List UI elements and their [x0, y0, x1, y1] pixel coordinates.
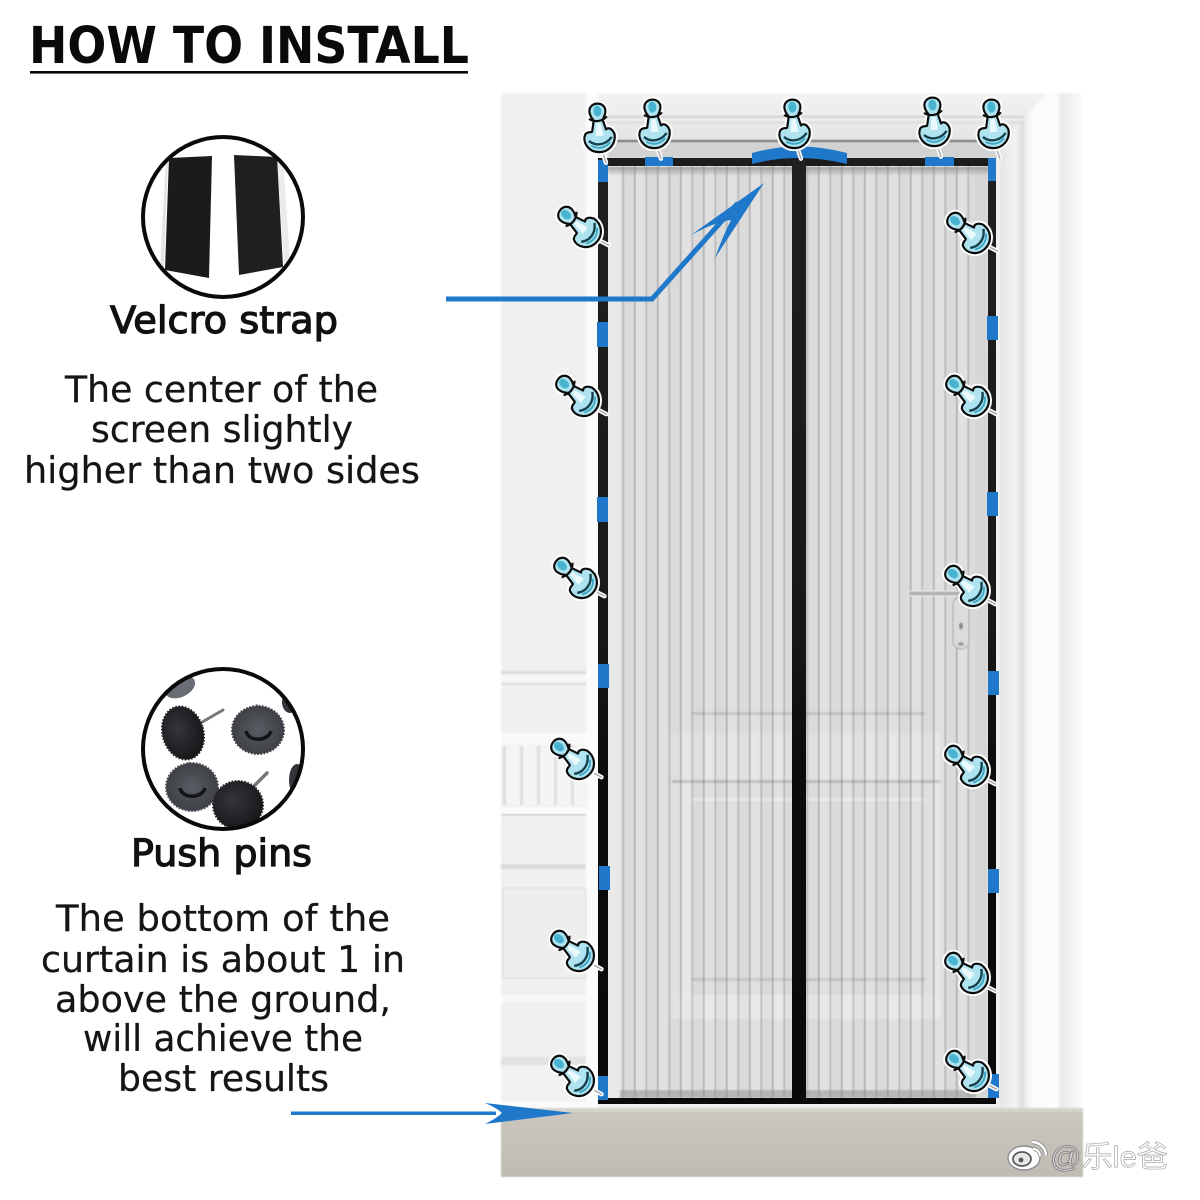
icons: push pins on right edge	[937, 204, 1005, 1104]
title: HOW TO INSTALL	[29, 17, 469, 76]
text block: velcro note	[24, 368, 420, 492]
text block: velcro note: The center of the	[64, 368, 378, 411]
icon: door handle	[908, 591, 969, 649]
text block: push pins note: The bottom of the	[55, 897, 390, 940]
heading: push pins: Push pins	[131, 832, 312, 875]
icons: push pins on top edge	[581, 96, 1011, 164]
velcro strips in blue	[597, 146, 999, 1100]
panel: door photo background	[501, 93, 1083, 1177]
text block: push pins note: will achieve the	[83, 1017, 363, 1060]
watermark: @乐le爸	[1050, 1141, 1168, 1174]
arrow: to velcro strap at centre top	[446, 183, 764, 299]
panel: pleated mesh screen	[608, 166, 988, 1098]
text block: velcro note: higher than two sides	[24, 449, 420, 492]
panel: black magnetic frame	[598, 158, 996, 1104]
icon: push pins circle	[143, 669, 305, 829]
text block: push pins note: above the ground,	[55, 978, 391, 1021]
panel: door leaf seen through the screen	[608, 166, 988, 1098]
text block: velcro note: screen slightly	[91, 408, 353, 451]
icons: push pins on left edge	[543, 198, 616, 1109]
arrow: to the floor gap	[291, 1103, 573, 1124]
icon: velcro strap circle	[143, 137, 303, 297]
text block: push pins note	[41, 897, 405, 1100]
heading: velcro strap: Velcro strap	[110, 299, 338, 342]
text block: push pins note: curtain is about 1 in	[41, 938, 405, 981]
text block: push pins note: best results	[118, 1057, 329, 1100]
icon: weibo logo	[1008, 1142, 1046, 1170]
